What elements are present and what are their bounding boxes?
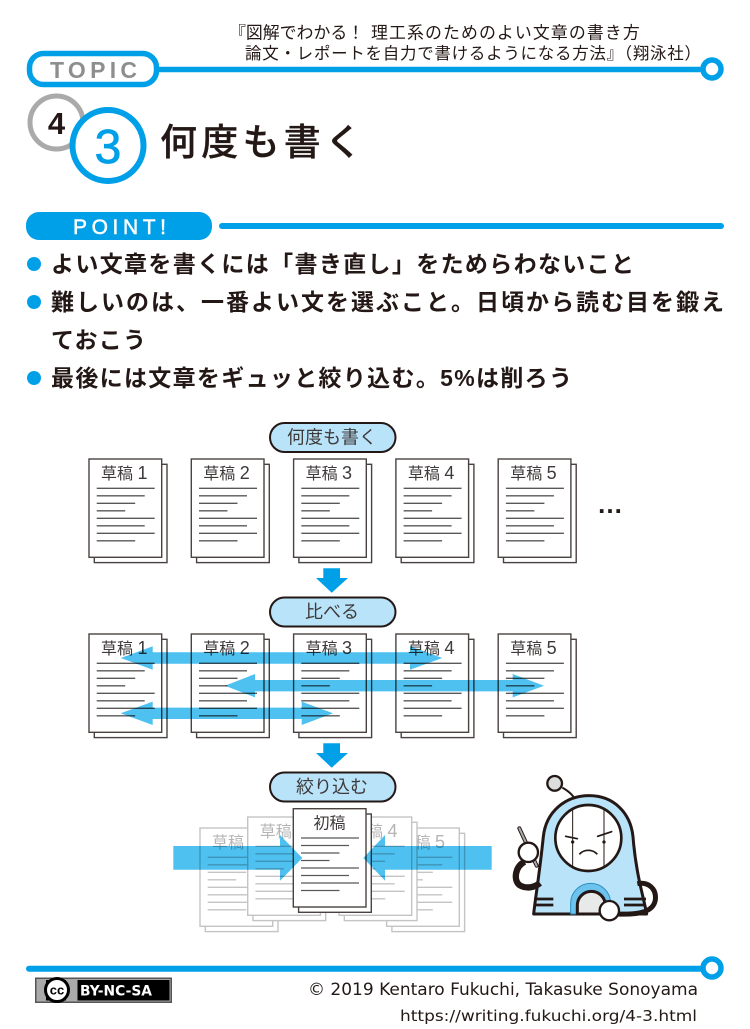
point label [26,212,212,240]
license badge: cc [50,982,64,998]
faded draft 4 [339,817,417,921]
source citation: 理工系のためのよい文章の書き方 [371,24,641,42]
faded draft 4: 草稿 4 [351,821,397,841]
arrow down 1 [316,568,348,593]
draft 4: 草稿 4 [408,638,454,658]
narrowing arrow from left [173,835,302,881]
title: 何度も書く [160,122,362,163]
chapter number 4 [30,96,83,149]
bullet point 2 [27,289,724,353]
draft 5: 草稿 5 [510,463,557,483]
bullet point 1: よい文章を書くには「書き直し」をためらわないこと [51,251,634,277]
comparison arrow: draft 2 to 5 [225,674,544,697]
draft 5 [498,459,576,563]
step label: narrow down [270,772,396,802]
arrow down 2 [316,743,348,768]
topic header line [158,60,721,78]
source citation [229,24,701,63]
step label: compare: 比べる [305,602,359,622]
faded draft 2: 草稿 2 [260,821,306,841]
bullet point 2: 難しいのは、一番よい文を選ぶこと。日頃から読む目を鍛え [51,289,724,315]
row 1: drafts [89,459,576,563]
copyright: © 2019 Kentaro Fukuchi, Takasuke Sonoyama [308,980,698,1000]
faded draft 2 [248,817,326,921]
section number 3 [72,110,144,181]
draft 3: 草稿 3 [306,638,352,658]
first draft: 初稿 [314,814,346,832]
footer line [29,959,721,977]
draft 5: 草稿 5 [510,638,557,658]
draft 2: 草稿 2 [203,638,250,658]
draft 1 [89,634,167,738]
step label: write many times: 何度も書く [287,428,377,448]
row 2: drafts [89,634,576,738]
license badge: BY-NC-SA [80,984,152,1000]
faded draft 1: 草稿 1 [212,832,258,852]
faded draft 5 [387,828,465,932]
faded draft 5: 草稿 5 [399,832,445,852]
narrowing arrow from right [363,835,492,881]
point label: POINT! [73,216,166,239]
first draft [293,809,371,912]
draft 1: 草稿 1 [101,463,147,483]
url: https://writing.fukuchi.org/4-3.html [400,1007,697,1025]
bullet point 3: 最後には文章をギュッと絞り込む。5%は削ろう [51,365,572,391]
source citation: 論文・レポートを自力で書けるようになる方法』（翔泳社） [245,44,701,63]
draft 5 [498,634,576,738]
section number 3: 3 [95,121,121,174]
draft 2 [191,459,269,563]
draft 1: 草稿 1 [101,638,147,658]
draft 2: 草稿 2 [203,463,250,483]
comparison arrow: draft 1 to 4 [121,646,442,670]
faded draft 1 [200,828,278,932]
step label: write many times [270,423,396,452]
bullet point 2: ておこう [51,327,146,353]
draft 3 [294,459,372,563]
comparison arrow: draft 1 to 3 [121,702,333,725]
topic label: TOPIC [50,57,137,83]
draft 3 [294,634,372,738]
topic label [30,54,156,84]
icon: robot mascot [516,776,655,920]
draft 1 [89,459,167,563]
draft 3: 草稿 3 [306,463,352,483]
draft 4 [396,459,474,563]
step label: compare [270,598,396,626]
license badge [35,978,172,1003]
draft 2 [191,634,269,738]
step label: narrow down: 絞り込む [296,777,368,797]
chapter number 4: 4 [48,106,66,141]
source citation: 『図解でわかる！ [229,24,364,42]
ellipsis: … [597,489,623,519]
point header line [222,223,721,229]
draft 4: 草稿 4 [408,463,454,483]
draft 4 [396,634,474,738]
